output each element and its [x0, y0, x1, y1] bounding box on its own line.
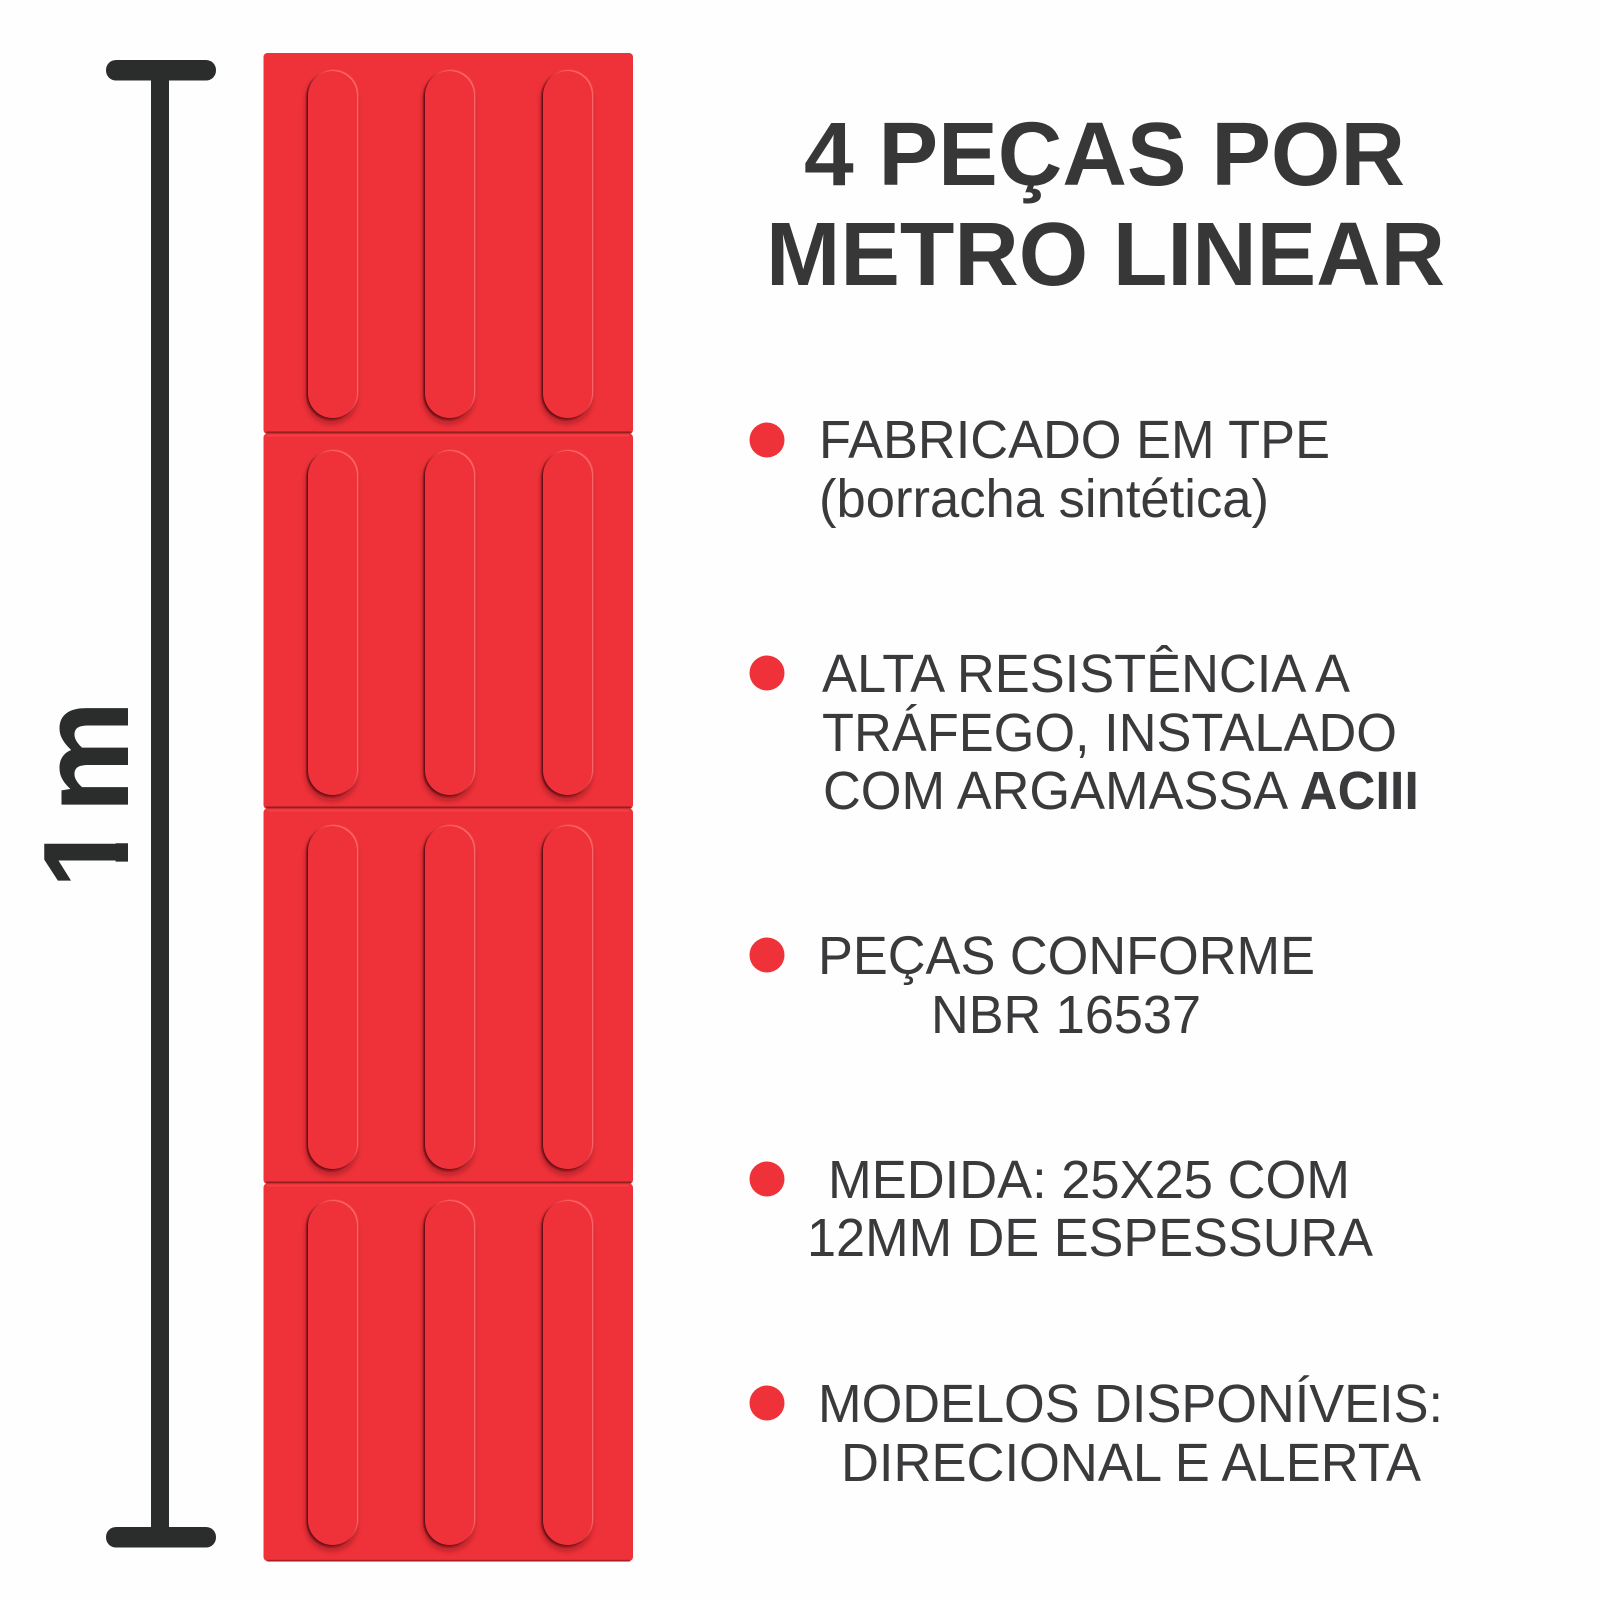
bullet: models: DIRECIONAL E ALERTA: [841, 1433, 1421, 1493]
tile 4: [264, 1184, 633, 1562]
tile 3: [264, 808, 633, 1184]
bullet: dimensions: 12MM DE ESPESSURA: [807, 1208, 1373, 1268]
scale label: 1 m: 1: [18, 821, 154, 889]
bullet: standard: NBR 16537: [931, 985, 1201, 1045]
bullet: material: [750, 410, 1330, 529]
tile 1: [264, 53, 633, 434]
bullet: dimensions: [750, 1150, 1373, 1268]
bullet: material: FABRICADO EM TPE: [819, 410, 1330, 470]
title: 4 PEÇAS POR: [804, 105, 1405, 205]
tile 2: [264, 434, 633, 809]
title: METRO LINEAR: [766, 205, 1445, 305]
panel: tactile floor tiles: [264, 53, 633, 1562]
bullet: material: (borracha sintética): [819, 469, 1269, 529]
bullet: standard: [750, 926, 1315, 1045]
bullet: resistance: COM ARGAMASSA ACIII: [823, 761, 1419, 821]
bullet: resistance: ALTA RESISTÊNCIA A: [822, 644, 1350, 704]
scale label: 1 m: [44, 708, 128, 881]
bullet: resistance: TRÁFEGO, INSTALADO: [822, 703, 1397, 763]
scale bar: 1 metre: [106, 60, 216, 1548]
bullet: dimensions: MEDIDA: 25X25 COM: [828, 1150, 1350, 1210]
bullet: models: MODELOS DISPONÍVEIS:: [818, 1374, 1443, 1434]
bullet: models: [750, 1374, 1443, 1493]
bullet: resistance: [750, 644, 1419, 821]
title: [766, 105, 1445, 305]
bullet: standard: PEÇAS CONFORME: [818, 926, 1315, 986]
